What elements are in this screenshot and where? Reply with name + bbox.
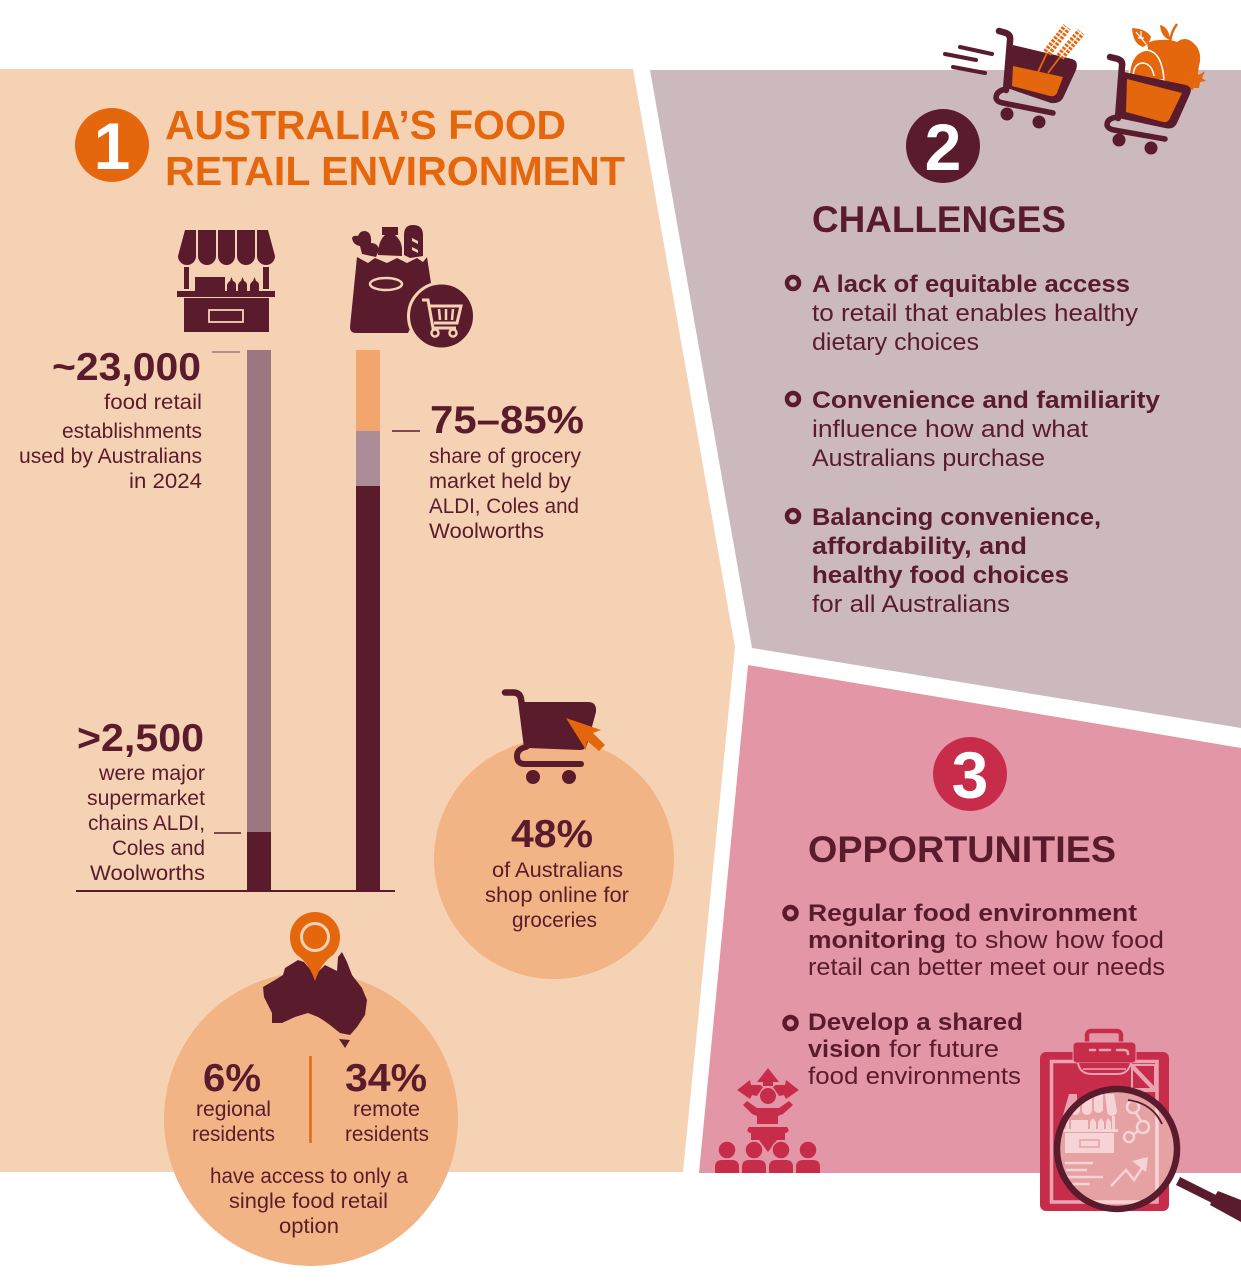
- stat: 75-85% market share: market held by: [429, 470, 572, 493]
- challenge: balancing choices: [787, 504, 1101, 618]
- chart baseline and leader lines: [76, 352, 420, 891]
- callout: online shopping: of Australians: [492, 859, 623, 882]
- callout: regional and remote access: option: [279, 1215, 339, 1238]
- heading number 2: [906, 109, 980, 184]
- stat: 75-85% market share: share of grocery: [429, 445, 581, 468]
- challenge: convenience and familiarity: [787, 387, 1161, 472]
- icon: online cart: [505, 692, 605, 784]
- heading number 3: [933, 737, 1007, 812]
- icon: magnifying glass: [1057, 1089, 1241, 1222]
- bar chart: retail establishments: [247, 350, 271, 891]
- opportunity: shared vision: Develop a shared: [808, 1009, 1023, 1036]
- challenge: balancing choices: affordability, and: [812, 533, 1027, 560]
- heading: challenges: CHALLENGES: [812, 199, 1066, 240]
- callout: regional and remote access: single food retail: [229, 1190, 388, 1213]
- stat: 2,500 supermarkets: Woolworths: [90, 862, 205, 885]
- stat: 23,000 establishments: in 2024: [129, 470, 202, 493]
- challenge: balancing choices: healthy food choices: [812, 562, 1069, 589]
- challenge: balancing choices: for all Australians: [812, 591, 1010, 618]
- opportunity: shared vision: [784, 1009, 1023, 1090]
- icon: healthy food cart: [1107, 24, 1206, 154]
- stat: 23,000 establishments: food retail: [104, 391, 202, 414]
- stat: 23,000 establishments: [19, 346, 202, 493]
- callout: regional and remote access: residents: [192, 1123, 275, 1146]
- callout: regional and remote access: residents: [345, 1123, 429, 1146]
- challenge: convenience and familiarity: Australians purchase: [812, 445, 1045, 472]
- bar chart: grocery market share: [356, 350, 380, 891]
- heading: Australia's food retail environment: [165, 102, 625, 194]
- challenge: equitable access: to retail that enables healthy: [812, 300, 1138, 327]
- stat: 75-85% market share: [429, 399, 584, 543]
- stat: 23,000 establishments: ~23,000: [52, 346, 201, 389]
- opportunity: monitoring: retail can better meet our needs: [808, 954, 1165, 981]
- callout: regional and remote access: regional: [196, 1098, 271, 1121]
- stat: 75-85% market share: Woolworths: [429, 520, 544, 543]
- opportunity: shared vision: vision: [808, 1036, 881, 1063]
- heading: Australia's food retail environment: RETAIL ENVIRONMENT: [165, 148, 625, 194]
- heading number 3: 3: [952, 738, 988, 812]
- stat: 2,500 supermarkets: supermarket: [87, 787, 205, 810]
- heading number 1: [75, 108, 149, 183]
- opportunity: shared vision: food environments: [808, 1063, 1021, 1090]
- heading number 1: 1: [94, 109, 130, 183]
- callout: online shopping: 48%: [511, 813, 593, 856]
- stat: 2,500 supermarkets: >2,500: [77, 717, 204, 760]
- stat: 2,500 supermarkets: Coles and: [112, 837, 205, 860]
- stat: 2,500 supermarkets: [77, 717, 205, 885]
- icon: Australia map with pin: [263, 912, 367, 1048]
- callout: regional and remote access: have access to only a: [210, 1165, 408, 1188]
- icon: grocery bag with cart: [350, 225, 474, 349]
- callout: online shopping: [434, 692, 674, 979]
- callout: regional and remote access: [164, 912, 458, 1266]
- heading: opportunities: OPPORTUNITIES: [808, 829, 1116, 870]
- panel: opportunities: [699, 665, 1241, 1222]
- callout: regional and remote access: remote: [353, 1098, 420, 1121]
- icon: leader and community: [715, 1068, 820, 1173]
- stat: 75-85% market share: 75–85%: [430, 399, 584, 442]
- icon: clipboard under magnifier: [1040, 1031, 1177, 1211]
- heading: Australia's food retail environment: AUSTRALIA’S FOOD: [165, 102, 566, 148]
- stat: 23,000 establishments: establishments: [62, 420, 202, 443]
- callout: online shopping: shop online for: [485, 884, 629, 907]
- stat: 75-85% market share: ALDI, Coles and: [429, 495, 579, 518]
- opportunity: shared vision: for future: [889, 1036, 999, 1063]
- heading number 2: 2: [925, 110, 961, 184]
- stat: 23,000 establishments: used by Australians: [19, 445, 202, 468]
- challenge: balancing choices: Balancing convenience,: [812, 504, 1101, 531]
- callout: regional and remote access: 34%: [345, 1057, 427, 1100]
- panel: food retail environment: [0, 69, 735, 1266]
- challenge: equitable access: dietary choices: [812, 329, 979, 356]
- opportunity: monitoring: monitoring: [808, 927, 946, 954]
- challenge: convenience and familiarity: Convenience and familiarity: [812, 387, 1161, 414]
- icon: fast cart with grain: [945, 27, 1081, 128]
- challenge: equitable access: A lack of equitable access: [812, 271, 1130, 298]
- opportunity: monitoring: to show how food: [955, 927, 1164, 954]
- callout: regional and remote access: 6%: [203, 1057, 261, 1100]
- icon: market stall: [177, 230, 275, 332]
- challenge: convenience and familiarity: influence how and what: [812, 416, 1088, 443]
- opportunity: monitoring: Regular food environment: [808, 900, 1137, 927]
- callout: online shopping: groceries: [512, 909, 597, 932]
- stat: 2,500 supermarkets: were major: [98, 762, 205, 785]
- opportunity: monitoring: [784, 900, 1165, 981]
- challenge: equitable access: [787, 271, 1138, 356]
- stat: 2,500 supermarkets: chains ALDI,: [88, 812, 205, 835]
- panel: challenges: [650, 24, 1241, 728]
